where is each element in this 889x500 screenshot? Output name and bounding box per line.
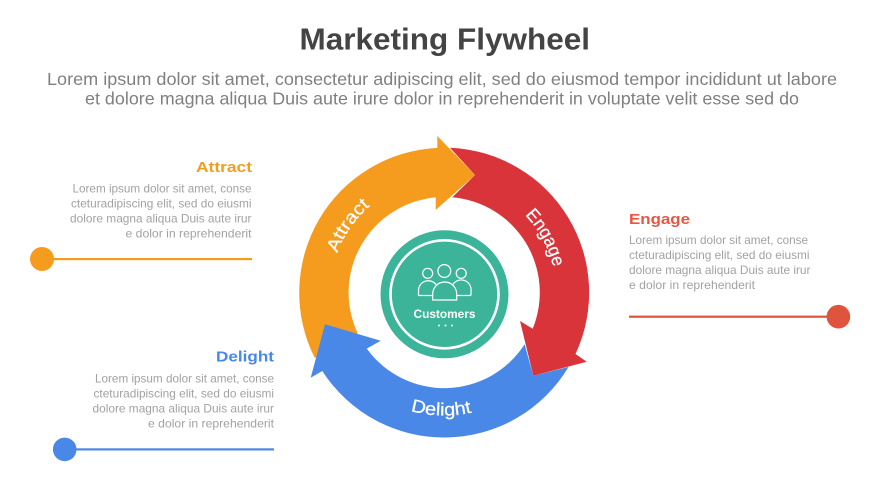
center badge: customers — [380, 230, 508, 358]
delight arrow: Delight — [412, 399, 472, 420]
delight body text: e dolor in reprehenderit — [148, 417, 275, 431]
icon: customers group — [418, 265, 471, 300]
subtitle — [47, 69, 837, 108]
delight leader line — [53, 438, 274, 461]
attract body text: cteturadipiscing elit, sed do eiusmi — [71, 196, 252, 210]
attract body text: dolore magna aliqua Duis aute irur — [70, 212, 252, 226]
delight body text — [92, 372, 275, 431]
delight body text: Lorem ipsum dolor sit amet, conse — [95, 372, 274, 386]
subtitle: Lorem ipsum dolor sit amet, consectetur adipiscing elit, sed do eiusmod tempor incididunt ut labore — [47, 69, 837, 89]
delight heading: Delight — [216, 349, 274, 366]
flywheel diagram — [299, 136, 590, 438]
attract body text: Lorem ipsum dolor sit amet, conse — [72, 182, 252, 196]
engage arrow: Engage — [526, 208, 562, 266]
engage body text: dolore magna aliqua Duis aute irur — [629, 263, 810, 277]
dots — [438, 324, 453, 326]
title: Marketing Flywheel — [300, 22, 590, 56]
attract arrow — [299, 136, 475, 358]
attract leader line — [30, 247, 252, 271]
attract heading: Attract — [196, 159, 252, 176]
engage body text: Lorem ipsum dolor sit amet, conse — [629, 233, 808, 247]
engage leader line — [629, 305, 850, 329]
engage body text — [629, 233, 810, 292]
panel: delight — [53, 349, 275, 461]
attract body text — [70, 182, 252, 240]
panel: engage — [629, 211, 850, 329]
engage body text: e dolor in reprehenderit — [629, 278, 756, 292]
customers label: Customers — [414, 307, 476, 321]
engage arrow — [450, 148, 590, 376]
attract arrow: Attract — [328, 198, 370, 254]
panel: attract — [30, 159, 252, 271]
engage heading: Engage — [629, 211, 690, 228]
delight arrow — [310, 324, 568, 438]
engage body text: cteturadipiscing elit, sed do eiusmi — [629, 248, 810, 262]
subtitle: et dolore magna aliqua Duis aute irure dolor in reprehenderit in voluptate velit esse sed do — [85, 88, 799, 108]
attract body text: e dolor in reprehenderit — [126, 226, 252, 240]
delight body text: cteturadipiscing elit, sed do eiusmi — [94, 387, 274, 401]
delight body text: dolore magna aliqua Duis aute irur — [92, 402, 274, 416]
